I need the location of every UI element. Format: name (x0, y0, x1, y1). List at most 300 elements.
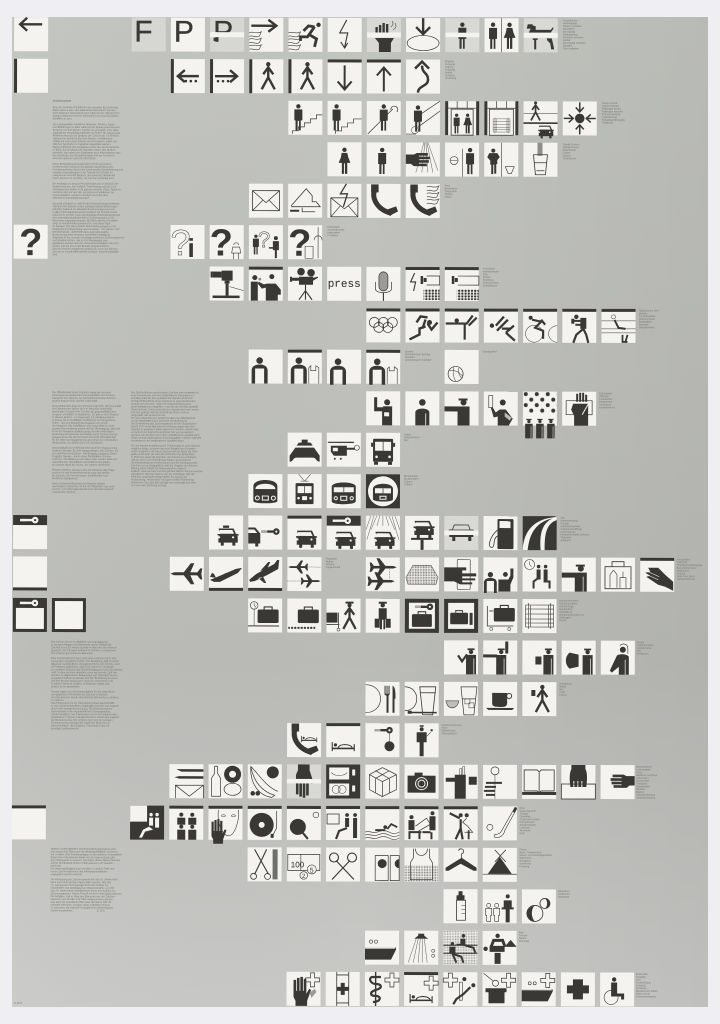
body text: Öffentlichkeit, right column: die Entwicklung des Kennzeichens aus der Bedeutung des (131, 461, 198, 465)
caption: post list: Notruf (445, 196, 452, 199)
caption: entertainment list: Tanzraum (520, 829, 531, 832)
icon: taxi (209, 515, 243, 550)
body text: Zeichen im Raum: Die Aufgabe, daß in München Elemente aus der Zeichen- (51, 895, 116, 898)
row: cars (13, 515, 590, 550)
body text: Öffentlichkeit, left column: Fragetür, Garage - durch einen Randbalken zu kenn- (52, 455, 112, 458)
caption: athletes list: Sanitäter (405, 356, 415, 359)
caption: media list: Rundfunk (483, 279, 494, 282)
body text: Öffentlichkeit, left column: positive Beschreibung basiert auf der Übertragung, daß eine (52, 426, 121, 430)
icon: man on stairs up (288, 101, 322, 135)
icon: beach balls (522, 889, 556, 923)
caption: entertainment list: Golf (520, 832, 524, 835)
body text: Öffentlichkeit, right column: Aktualisiert. Manche Figuren von die Grundlage, das die (131, 473, 195, 476)
icon: sauna (443, 931, 477, 965)
body text: Öffentlichkeit, right column: Zeichen gefragt, daß die Bedeutung dieses, was es (131, 411, 190, 414)
icon: top bar arrow down (328, 59, 362, 93)
caption: safety list: Rauchen verboten (563, 36, 584, 39)
body text: Zeichensystem: zeigt zu Grundmuster gründet sich, und diese Figur (53, 222, 111, 225)
body text: Zeichensystem: Generell entstand es, daß für die Komponierung bewährtes (53, 202, 120, 205)
caption: safety list: Durchgang (563, 31, 576, 34)
body text: Öffentlichkeit, left column: werdenden Gruppen von Zeichen ein grammatikalisches (52, 410, 117, 413)
caption: airport services list: Handschuhzone (677, 578, 695, 581)
caption: luggage list: Gepäckträger (559, 605, 575, 608)
caption: athletes list: Umkleideraum Sanitäter (405, 359, 432, 362)
caption: transport list: Bus (404, 439, 409, 442)
body text: Zeichen und Sprache: und graphische Dimension bei Zeichen im Bereich (51, 693, 108, 696)
caption: medical list: Sanitäter (636, 976, 646, 979)
caption: shopping list: Fotogerät (636, 782, 647, 785)
icon: hand with ticket (444, 557, 478, 591)
caption: officials list: Offizielle (599, 395, 609, 398)
icon: hand injury cross (286, 972, 321, 1006)
body text: Zeichensystem: Olympische Spiele ist das kein Novum. In Melbourne (53, 137, 113, 140)
body text: Zeichen und Sprache: Konvention eingeführt werden. Die Erwartung, daß ein jeder (51, 660, 119, 663)
body text: Zeichen und Sprache: Zeichen zu allgemeinen Bekanntheit und Üblichkeit formen. (51, 673, 118, 677)
caption: entertainment list: Kinoprogramm (520, 810, 536, 813)
body text: Zeichen und Sprache: allgemein verständliche und gebräuchliche sein könnte, sieht (51, 663, 120, 666)
icon: dancers (444, 806, 478, 840)
caption: services list: Garderobe (519, 862, 532, 865)
caption: media list: Presse (483, 276, 491, 279)
icon: shaving socket and man (445, 143, 479, 177)
caption: stairs list: Treppe hinauf (602, 102, 617, 105)
icon: plane top view (170, 557, 204, 591)
icon: porter carrying suitcases (366, 599, 400, 633)
body text: Zeichensystem: gebucht zu werden. Dazu die Beteiligte Entwicklungsgruppe (53, 214, 121, 217)
icon: question and i: ? (170, 222, 191, 263)
icon: hand with ticket (562, 392, 596, 426)
caption: post list: Telefon (445, 193, 453, 196)
body text: Zeichen im Raum: Zeichensystemen. Dieser Prozeß ist noch nicht abgeschlossen. (51, 892, 123, 895)
caption: medical list: Apotheke (636, 987, 647, 990)
icon: interview (249, 267, 283, 301)
body text: Zeichen und Sprache: Zeichen ist es. Es wurde deshalb in München der Versuch (51, 646, 117, 649)
body text: Öffentlichkeit, right column: Gruppe von Zeichen - wenn die Gruppenbildung eine (131, 403, 192, 406)
row: airport (13, 556, 703, 593)
row: information (14, 222, 345, 265)
body text: Zeichen und Sprache: durch eine verbale Bezeichnung. Die Bezeichnung der (51, 707, 113, 711)
icon: children and nanny (483, 889, 517, 923)
caption: post list: Briefkasten (445, 187, 458, 190)
icon: freight crate (522, 599, 557, 633)
caption: airport list: Ankunft (326, 563, 335, 566)
caption: cars list: Autovermietung (560, 519, 579, 523)
icon: winding arrow detour (406, 60, 440, 94)
icon: bathtub with soap (365, 931, 399, 965)
icon: seated with screen (326, 806, 360, 840)
icon: arrival and departure planes (366, 557, 400, 591)
body text: Öffentlichkeit, right column: rissen ausgehen oder auch Zeichen auf der Basis der Foto- (131, 450, 198, 453)
caption: officials list: Programme (599, 401, 613, 404)
body text: Zeichen und Sprache: nämlich Englisch und Französisch und in der Sprache des (51, 713, 117, 716)
body text: Zeichensystem: (Mexiko) bekannt ein aktuelles Bestimmungen und vom (53, 208, 115, 211)
body text: Öffentlichkeit, left column: ähnliches signalisieren. (52, 477, 79, 480)
body text: Zeichensystem: bestimmenden Tendenz der globalen Ausbreitung des (53, 166, 114, 169)
body text: Zeichensystem: üblichen Sportarten in Vignetten abgebildet werden. (53, 143, 111, 146)
caption: luggage list: Schließfach (559, 611, 573, 614)
body text: Zeichensystem: zugängliche Verständigungsbasis zu finden. Als Lösung des (53, 132, 121, 135)
icon: medicinal bath cross (522, 972, 556, 1006)
body text: Öffentlichkeit, right column: Spiele 1972 vorsichtig baut den Anforderungen aller drei (131, 425, 195, 428)
body text: Zeichen im Raum: kann noch nicht genug eingeschätzt werden. Wie das (51, 881, 112, 884)
icon: arrivals departures (287, 557, 321, 591)
icon: rented car garage (327, 516, 361, 550)
body text: Zeichensystem: Zeichen in visuell differenzierte Gruppen zusammengefaßt (52, 250, 119, 254)
icon: dentist (443, 972, 477, 1006)
icon: open book (522, 765, 556, 799)
body text: Öffentlichkeit, right column: ein jedoch nur begrenzt erreichbar. Die von semantisch (131, 431, 194, 434)
caption: medical list: Schwerbehinderte (636, 995, 657, 998)
body text: Zeichensystem: zudem und die durch den Einsatz programmiertes (52, 245, 110, 248)
icon: officer with dish (562, 641, 596, 675)
caption: services list: Camping (519, 865, 530, 868)
icon: parking prohibited (210, 16, 244, 52)
caption: luggage list: Gepäckannahme (559, 600, 579, 603)
icon: tent (483, 848, 517, 882)
icon: blank with bottom bar (13, 556, 47, 590)
caption: children list: Spielplatz (558, 896, 570, 899)
icon: phone and bed (287, 723, 321, 757)
caption: transport list: Hafen (404, 433, 411, 436)
caption: olympic list: Turnhalle/Halle (639, 315, 656, 318)
body text: Zeichen und Sprache: Sachverhalte in den hauptamtlichen Fremdsprachen, (51, 710, 111, 713)
icon: person official (405, 391, 439, 425)
caption: cars list: Taxi (560, 517, 565, 520)
icon: athlete running (405, 308, 440, 343)
icon: athlete (249, 350, 283, 384)
icon: walker with snack (522, 682, 556, 716)
body text: Öffentlichkeit, right column: grammatikalischen Begriffen - und des aus formale Qualität (131, 405, 198, 409)
body text: Zeichen im Raum: was aber der spezifische Plan oder der Hand, daß die (51, 901, 112, 904)
body text: Öffentlichkeit, left column: für die Wahl der Negativstriche als primär die individuellen (52, 439, 118, 442)
icon: bar with walker right (288, 59, 322, 93)
caption: toilets list: Toilette Herren (563, 146, 580, 149)
icon: baggage trolley (483, 599, 517, 633)
body text: Zeichen und Sprache: Eine Zeichensprache kann nicht ohne weiteres durch eine (51, 657, 117, 660)
icon: person prohibited (445, 18, 479, 52)
body text: Öffentlichkeit, right column: Zeichen von Gruppen zur hohen syntaktischen Qualität kann (131, 434, 200, 437)
body text: Öffentlichkeit, right column: formale Entwicklung eines Zeichens zu einer bestimmten (131, 400, 196, 403)
caption: children list: Kinderhort (558, 893, 570, 896)
icon: no parking car (444, 516, 478, 550)
caption: toilets list: Toilette Damen (563, 143, 580, 146)
caption: luggage list: Gepäckaufbewahrung (559, 614, 584, 617)
caption: entertainment list: Diskothek (520, 815, 531, 818)
body text: Öffentlichkeit, right column: vielfach. Viele von den Formen gebrauchlichen Zeichen werden (131, 470, 203, 473)
icon: tobacco pipe (444, 765, 478, 799)
body text: Öffentlichkeit, left column: ordnung, die in Dreifaltiger, Schildkreuz und Vorgreifens (52, 419, 116, 422)
icon: hand under water (406, 142, 440, 177)
caption: food list: Restaurant (560, 683, 572, 686)
row: bathing (365, 931, 530, 965)
icon: shower (404, 931, 438, 965)
caption: medical list: Rotes Kreuz (636, 993, 650, 996)
body text: Öffentlichkeit, right column: Dinge einmal ursprüngliche Zeichenqualität in diesen optimale (131, 437, 202, 440)
icon: theatre mask and hand (208, 806, 243, 844)
icon: gift box (365, 765, 399, 799)
icon: telephone (367, 184, 401, 218)
icon: officer directing (483, 640, 517, 674)
body text: Öffentlichkeit, left column: Bedeutung bei gewisser Grundlage durch Zeichen werden (52, 433, 118, 436)
body text: Zeichensystem: in Tokio. Auf der Basis der Vignetten haben das Sprach- (53, 149, 116, 152)
icon: rower (601, 309, 636, 343)
icon: passenger lift (445, 101, 479, 135)
row: toilets and washroom (327, 142, 580, 177)
body text: Zeichensystem: (1956) hat zum ersten Mal ein Zeichensystem, außer der (53, 140, 117, 143)
caption: stairs list: Lastenaufzug (602, 116, 617, 119)
caption: services list: Wasch- und Schnellgaststelle (519, 854, 553, 857)
caption: airport services list: Duty-Free Shop (677, 575, 695, 578)
icon: dog prohibited (524, 18, 558, 52)
caption: media list: Fernschreiber (483, 282, 499, 285)
icon: question mark (14, 222, 48, 264)
body text: Zeichen im Raum: zu sprechen, als vielmehr Vorgegebenes weitertragend (51, 906, 113, 910)
body text: Zeichensystem: und Erklärungen in allen während der Spiele gesprochenen (53, 126, 120, 129)
icon: arrow to ellipse meeting point (406, 18, 440, 52)
caption: shopping list: Bücher (636, 791, 644, 794)
body text: Öffentlichkeit, left column: der Negation: Sitz Spielfläche, das Schachfeld zu einer (52, 425, 114, 428)
body text: Zeichen und Sprache: andere dir zu assoziieren. (51, 685, 81, 688)
icon: S-Bahn (327, 474, 361, 508)
icon: film camera (288, 267, 322, 301)
icon: freight lift (484, 101, 518, 135)
icon: cyclist (523, 309, 557, 343)
icon: bank notes and coins: 100 (291, 860, 305, 869)
body text: Öffentlichkeit, right column: Die Entwicklung des Zeichensystems für die Olympischen (131, 422, 197, 426)
caption: officers list: Hostessen (637, 652, 649, 655)
caption: entertainment list: Fernsehraum (520, 821, 534, 824)
caption: food list: Café (560, 691, 565, 694)
caption: luggage list: Gepäckausgabe (559, 602, 578, 605)
caption: directions list: Notfall (445, 71, 452, 74)
icon: duty free bottles (601, 558, 635, 592)
icon: key and dark frame (13, 598, 47, 632)
caption: safety list: Toiletten (563, 45, 573, 48)
caption: media list: Film (483, 273, 488, 276)
body text: Öffentlichkeit, left column: Grammatikalisches Merkmal einer anderen Gruppe ist die (52, 447, 118, 450)
icon: runner escaping flames (288, 18, 323, 52)
caption: shopping list: Tabakwaren (636, 785, 650, 788)
body text: Zeichen im Raum: neues Zeichensystemen das Informationsmittlelen (51, 870, 108, 873)
icon: blank left bar (14, 59, 48, 93)
body text: Zeichen im Raum: 19. Jahrhundert nicht gewagt durch den Aufbau der (51, 884, 109, 887)
caption: shopping list: Lebensmittel (636, 768, 651, 771)
caption: luggage list: Rollwagen (559, 616, 571, 619)
caption: stairs list: Treffpunkt (602, 122, 613, 125)
body text: Zeichensystem: Vorgegebenen dürfen nicht gelesen werden. Diese Tatsache (53, 188, 121, 191)
caption: officials list: Funktionäre (599, 398, 613, 401)
icon: coat hanger (444, 848, 478, 882)
caption: media list: Fernsehen (483, 268, 496, 271)
body text: Zeichensystem: eine international gebräuchliche Zeichensprache in ein (53, 216, 115, 220)
icon: bank notes and coins (287, 847, 321, 881)
body text: Zeichen und Sprache: berücksichtigen: also Englisch, Französisch und die (51, 724, 110, 728)
caption: directions list: Eingang (445, 60, 455, 63)
icon: scissors and comb (248, 847, 282, 881)
body text: Zeichen und Sprache: Kennzeichnung Olympischer Stadt drei Sprachen zu (51, 722, 111, 725)
icon: hand on book (561, 765, 595, 799)
body text: Zeichen im Raum: eine bestimmte Farbe und die Wirkungsfähigkeit. Gehört zu (51, 850, 118, 854)
caption: food list: Buffet (560, 685, 566, 688)
icon: dark seated person (130, 806, 164, 840)
icon: room key (365, 723, 399, 757)
icon: official pass (366, 391, 400, 425)
caption: accommodation list: Hotelzimmer (441, 729, 456, 732)
caption: directions list: Zugang (445, 66, 454, 69)
icon: typewriter press (445, 267, 479, 301)
icon: washing machines (365, 848, 399, 882)
icon: microphone (366, 267, 400, 301)
icon: pot with cross (482, 972, 517, 1006)
icon: bus (366, 433, 400, 467)
body text: Zeichensystem: Straßenzeichenbeachtung nach Gruppen - wie Gehen- und (53, 228, 120, 231)
caption: officials list: Zuschauer (599, 403, 611, 406)
caption: medical list: Arzt (636, 979, 641, 982)
body text: Zeichen im Raum: Weitere Zuständigkeiten des Beschilderungssystems sind (51, 848, 116, 851)
icon: first aider (327, 350, 361, 385)
caption: safety list: Rettungsweg (563, 33, 578, 36)
icon: massage (483, 931, 517, 965)
body text: Zeichen und Sprache: Daraus ergab sich die Notwendigkeit, für die sprachliche (51, 690, 115, 694)
icon: enquiry desk: ? (258, 227, 270, 252)
caption: safety list: Durchfahrt (563, 28, 575, 31)
icon: roof net (405, 557, 439, 591)
caption: rail list: U-Bahn (404, 483, 413, 486)
icon: question mark: ? (19, 222, 42, 264)
body text: Öffentlichkeit, left column: system braucht eine visuelle Grammatik. (52, 400, 98, 403)
body text: Öffentlichkeit, left column: Diese Zusammenfassung von Gruppen erlaubt (52, 482, 105, 485)
caption: olympic list: Radstadion (639, 321, 652, 324)
body text: Zeichen im Raum: Die Wirkungsfähigkeit kann im Mikro- in jedem Falle und (51, 867, 115, 871)
caption: bathing list: Massage (519, 940, 530, 943)
caption: shopping list: Schreibwaren (636, 766, 652, 769)
icon: people waving (483, 557, 517, 593)
icon: record player (248, 806, 282, 840)
caption: shopping list: Selbstbedienung (636, 796, 656, 799)
body text: Öffentlichkeit, left column: Die Öffentlichkeit eines Zeichens hängt ab von einer (52, 390, 111, 394)
caption: training ground: Trainingsfeld (482, 351, 497, 354)
caption: accommodation list: Hotelreservierung (441, 724, 462, 727)
icon: question and i (170, 222, 205, 263)
icon: caduceus doctor (365, 972, 399, 1006)
body text: Öffentlichkeit, left column: entwickelten System. (52, 491, 76, 494)
body text: Öffentlichkeit, left column: in diesem System - im Gegensatz zur Straßenverkehrs- (52, 416, 115, 419)
caption: safety list: Parken verboten (563, 25, 582, 28)
body text: Öffentlichkeit, left column: Form der Negation deutlich genug und die eindeutigen (52, 430, 114, 433)
row: children (443, 889, 570, 923)
body text: Öffentlichkeit, left column: für Zeichen, die Verordnungen, Schließzeiten und (52, 474, 109, 477)
body text: Zeichensystem: Angebote in der Summe Grundlage zwischen Zeichensystemen (52, 236, 125, 239)
body text: Zeichensystem: bildes wird es sein, den zahlreichen Besuchern aus den (53, 109, 116, 112)
caption: services list: Bank / Geldwechsel (519, 851, 542, 854)
icon: telegram (327, 184, 361, 218)
icon: crossed keys (326, 847, 360, 882)
icon: flower and hand (483, 765, 517, 799)
icon: escalator up (367, 101, 401, 135)
caption: safety list: Sammelplatz (563, 22, 578, 25)
caption: olympic list: Volleyballhalle (639, 326, 655, 329)
icon: letter box (288, 184, 322, 218)
icon: seated reading (404, 806, 439, 840)
body text: Zeichen und Sprache: zu nehmen. (51, 699, 65, 702)
caption: media list: Schreibraum (483, 284, 497, 287)
icon: tram (288, 474, 322, 508)
icon: bar with left arrow on conveyor (171, 59, 205, 93)
body text: Zeichensystem: Bezeichnung einer Gruppen auf direkte Gestaltung (53, 233, 110, 237)
icon: waiting room (523, 557, 557, 592)
icon: train (248, 474, 282, 508)
body text: Zeichensystem: Straßenzeichen. Die Vorfahrt, Fahrrichtung und die in ihr (53, 185, 116, 188)
icon: training ball (445, 350, 479, 384)
caption: olympic list: Stadion (639, 312, 648, 315)
row: officials (366, 391, 615, 439)
body text: Öffentlichkeit, right column: nur noch eine Richtung anzeigt. (131, 484, 167, 487)
body text: Zeichensystem: Problems bot sich die Sprache der Zeichen an. Im Bereich (53, 134, 119, 138)
body text: Öffentlichkeit, left column: deutliche Einsatz: Es wird vorgeschlagen, alle Zeichen, die (52, 449, 119, 453)
caption: services list: Wäscherei (519, 857, 531, 860)
body text: Zeichensystem: gebildeten Zeichen des zur Verwertung befolgten. Sie sind (52, 242, 119, 245)
caption: post list: Telegramm (445, 190, 457, 193)
body text: Zeichen im Raum: der Schilder oder Schilderanlagen in die imitierten Konstellation (51, 853, 123, 856)
body text: Öffentlichkeit, right column: Zeichens ist es Designpflicht, daß die Vorgabe der Zeichen (131, 464, 198, 467)
body text: Zeichensystem: Fremdenverkehrs durch eine zunehmende Dynamisierung von (53, 168, 124, 172)
caption: shopping list: Berühren verboten (636, 774, 658, 777)
body text: Öffentlichkeit, left column: Präsenz weiterer Gruppen sind zum Beispiel das Frage- (52, 469, 115, 472)
icon: drinking water glass (523, 143, 558, 177)
icon: letter F (132, 15, 166, 52)
body text: Zeichensystem: fotomorph angepasst wurden. Ein Blick auf das Schrittbild (53, 219, 118, 222)
row: entertainment (12, 805, 540, 844)
body text: Zeichensystem: Kommunikation, sondern erweitert auch aus dem (53, 194, 108, 197)
icon: pedestrian crossing over road (524, 101, 558, 138)
icon: letter F: F (134, 15, 153, 49)
caption: airport services list: Transitpassabfertigung (677, 564, 703, 567)
icon: hockey (483, 806, 517, 840)
body text: Öffentlichkeit, left column: Rotes - nur zum Beispiel das Negation von einem (52, 422, 108, 425)
caption: shopping list: Obst (636, 771, 642, 774)
icon: hospital bed cross (404, 972, 438, 1006)
icon: car rental with key (248, 516, 282, 550)
caption: bathing list: Bad (519, 931, 524, 934)
icon: television camera (210, 267, 244, 301)
body text: Öffentlichkeit, left column: ausgesetzt ist. Es sind Schwarz und weiß. Einheitlichkeit (52, 436, 116, 439)
caption: rail list: S-Bahn (404, 480, 413, 483)
icon: top bar arrow up (367, 59, 401, 94)
icon: blank top bar (12, 805, 46, 839)
icon: garage car (287, 516, 322, 550)
icon: plane landing (248, 557, 282, 591)
icon: hands top bar (640, 558, 674, 592)
caption: bathing list: Sauna (519, 937, 527, 940)
caption: officials list: Ehrengäste (599, 392, 613, 395)
caption: cars list: Autobahn (560, 539, 572, 542)
icon: athlete changing (288, 350, 322, 384)
body text: Öffentlichkeit, left column: Wirksamkeit, sie stehlen auch die Schranken. (52, 441, 104, 445)
icon: lightning high voltage (328, 18, 362, 52)
body text: Zeichen und Sprache: Das Piktogramm ist die Übersetzung eines Sachverhalts (51, 701, 115, 705)
body text: Zeichensystem: in allen Informationsbereichen bekannt ist, Zeichen neuer (53, 211, 117, 214)
caption: food list: Imbiss (560, 694, 568, 697)
icon: bottle and bread (209, 764, 243, 798)
caption: services list: Friseur (519, 848, 527, 851)
body text: Öffentlichkeit, right column: Verwendung, Hindernisse eine ganz einfach Bedeutung (131, 478, 194, 482)
icon: press: press (328, 279, 361, 291)
caption: entertainment list: Lesesaal (520, 826, 530, 830)
body text: Zeichensystem: Ein Analogon zu diesem Prozeß findet sich im Bereich der (53, 183, 118, 186)
body text: Zeichen und Sprache: die Bedeutung des IOC entsprochen, laut der verbalen (51, 719, 113, 722)
icon: boxer (562, 309, 596, 343)
caption: shopping list: Automaten (636, 777, 649, 780)
